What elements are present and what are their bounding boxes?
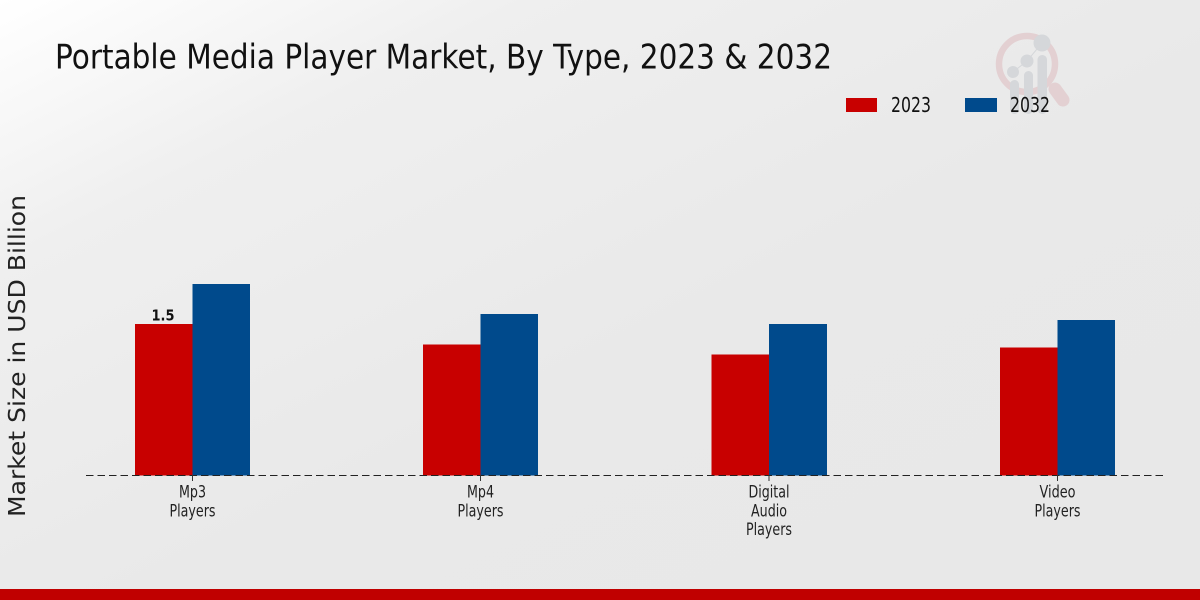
bar chart [135,284,1115,476]
x axis label: Video Players: Players [1034,502,1080,520]
group: Digital Audio Players [712,324,827,476]
legend item: 2032: 2032 [1010,93,1050,117]
group: Mp4 Players [423,314,538,476]
x axis label: Mp3 Players: Players [170,502,216,520]
x axis label: Digital Audio Players: Players [746,520,792,539]
title: Portable Media Player Market, By Type, 2023 & 2032 [55,38,832,76]
icon: watermark logo [999,34,1063,114]
x axis label: Digital Audio Players: Digital [748,482,790,502]
y axis label: Market Size in USD Billion [5,195,31,517]
group: Video Players [1000,320,1115,476]
legend item: 2023 [846,93,931,117]
group: Mp3 Players: 1.5 [152,307,174,325]
legend [846,93,1050,117]
x axis label: Mp3 Players [170,482,216,520]
x axis label: Digital Audio Players [746,482,792,539]
x axis label: Digital Audio Players: Audio [751,502,787,520]
x axis label: Mp4 Players [458,482,504,520]
legend item: 2023: 2023 [891,93,931,117]
group: Mp3 Players [135,284,250,476]
footer bar [0,589,1200,600]
x axis baseline [86,475,1164,481]
x axis label: Mp4 Players: Mp4 [467,482,494,502]
x axis label: Video Players [1034,482,1080,520]
x axis label: Video Players: Video [1040,482,1076,502]
x axis label: Mp3 Players: Mp3 [179,482,206,502]
legend item: 2032 [965,93,1050,117]
x axis label: Mp4 Players: Players [458,502,504,520]
